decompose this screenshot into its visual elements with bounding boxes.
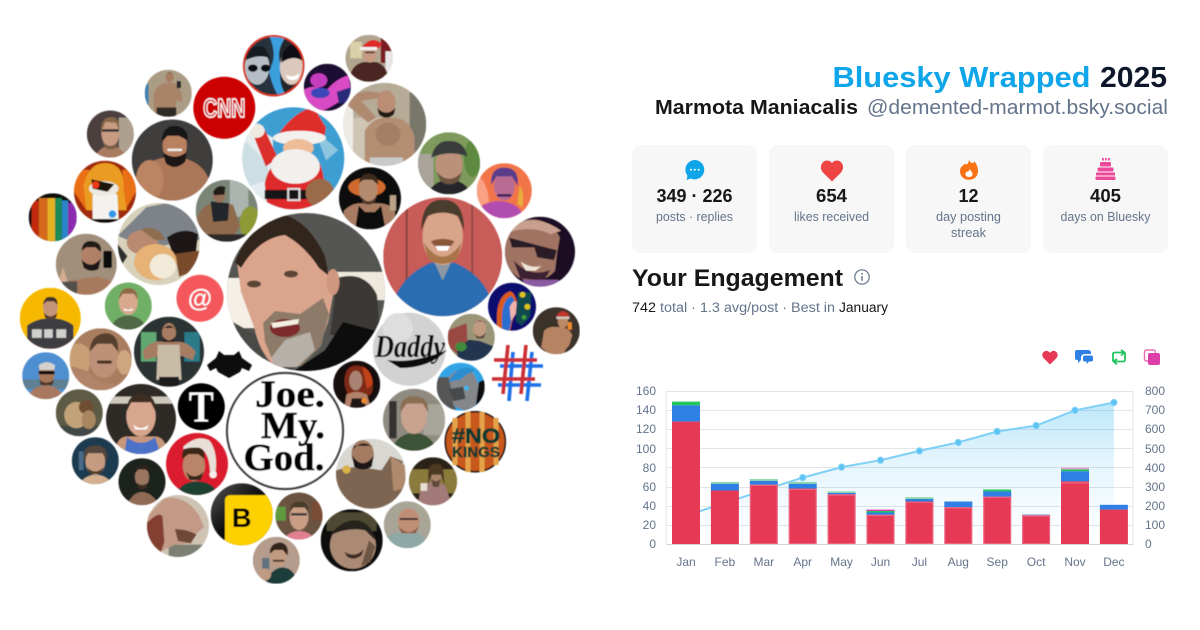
- avatar: stained glass: [488, 283, 536, 331]
- stat card: likes received: [769, 145, 894, 253]
- avatar: hairy chest man: [336, 439, 406, 509]
- month labels: Apr: [793, 555, 812, 569]
- stat card: days on Bluesky: days on Bluesky: [1060, 210, 1151, 224]
- avatar: yellow B logo: B: [232, 502, 252, 533]
- line points: [800, 399, 1117, 481]
- bar: Jun: [866, 510, 894, 544]
- avatar: bald man glasses: [384, 501, 431, 548]
- avatar: at sign logo: @: [188, 285, 212, 313]
- profile name and handle: Marmota Maniacalis: [655, 97, 858, 119]
- avatar: black tank top man: [339, 167, 401, 229]
- avatar: man on yellow: [20, 288, 81, 349]
- title: Bluesky Wrapped: [832, 62, 1090, 94]
- avatar: santa figurine: [240, 105, 346, 211]
- avatar: moustache purple portrait: [477, 163, 532, 218]
- avatar: twin men: [243, 35, 305, 96]
- icon: chat bubble: [685, 160, 704, 180]
- avatar: man lying with flowers: [448, 314, 495, 361]
- avatar: man with glasses: [87, 110, 134, 158]
- avatar: Joe My God logo: [227, 373, 343, 489]
- avatar: moustache man lying: [70, 328, 132, 390]
- icon: legend heart: [1042, 351, 1058, 364]
- icon: info: [855, 270, 869, 284]
- icon: black wolf logo: [207, 351, 252, 378]
- bar: Mar: [750, 479, 778, 544]
- avatar: New York Times logo: T: [189, 382, 214, 432]
- avatar: man on rocks: [196, 180, 261, 242]
- avatar: bearded shirtless man: [131, 118, 214, 202]
- stat card: day posting streak: day posting: [936, 210, 1001, 224]
- right axis labels: 100: [1145, 518, 1165, 532]
- avatar: CNN logo: [193, 77, 255, 139]
- avatar: grey furry wolf: [437, 363, 485, 411]
- avatar: gym mirror man: [134, 317, 204, 387]
- month labels: Aug: [948, 555, 969, 569]
- icon: heart: [821, 160, 843, 182]
- avatar: man in robe with drink: [409, 457, 457, 505]
- month labels: Dec: [1103, 555, 1125, 569]
- avatar: magenta sleeping: [304, 64, 351, 111]
- stat card: likes received: likes received: [794, 210, 869, 224]
- right axis labels: 300: [1145, 480, 1165, 494]
- heading: Your Engagement: Your Engagement: [632, 265, 843, 292]
- avatar: pale man: [383, 389, 445, 451]
- left axis labels: 0: [649, 537, 656, 551]
- cumulative area: [686, 402, 1114, 544]
- month labels: Feb: [715, 555, 736, 569]
- avatar: Joe My God logo: God.: [244, 437, 324, 479]
- avatar: dark portrait shirtless: [118, 458, 166, 505]
- month labels: Nov: [1064, 555, 1086, 569]
- avatar: man in santa hat on red: [166, 433, 228, 495]
- left axis labels: 120: [636, 422, 656, 436]
- avatar: man in jacket: [72, 437, 119, 484]
- bar: Aug: [944, 502, 972, 544]
- right axis labels: 0: [1145, 537, 1152, 551]
- left axis labels: 100: [636, 442, 656, 456]
- profile name and handle: [655, 97, 1168, 119]
- avatar: red haired woman: [333, 361, 380, 408]
- stat card: day posting streak: streak: [951, 226, 987, 240]
- avatar: bald man saluting: [343, 83, 426, 167]
- month labels: Mar: [753, 555, 774, 569]
- engagement summary: 742: [632, 300, 656, 315]
- bar: Jul: [905, 497, 933, 544]
- icon: hashtag red and blue: [492, 345, 543, 401]
- right axis labels: 600: [1145, 422, 1165, 436]
- right axis labels: 500: [1145, 442, 1165, 456]
- month labels: Oct: [1027, 555, 1046, 569]
- left axis labels: [636, 384, 656, 551]
- stat card: days on Bluesky: [1043, 145, 1168, 253]
- right axis labels: [1145, 384, 1165, 551]
- avatar: dark frame man: [321, 509, 383, 571]
- avatar: profile of man: [147, 495, 209, 557]
- avatar: New York Times logo: [178, 382, 225, 432]
- left axis labels: 160: [636, 384, 656, 398]
- avatar: Daddy logo: [373, 313, 447, 386]
- bar: Feb: [711, 482, 739, 544]
- stat card: day posting streak: 12: [958, 186, 978, 206]
- stat card: posts and replies: [632, 145, 757, 253]
- bar: Nov: [1061, 468, 1089, 544]
- engagement summary: [632, 300, 888, 315]
- stat card: days on Bluesky: 405: [1090, 186, 1121, 206]
- icon: legend quote: [1144, 350, 1160, 365]
- avatar: blue shirt man red wall: [383, 197, 502, 316]
- icon: legend replies: [1075, 350, 1093, 364]
- avatar: man with glasses in garden: [276, 492, 322, 540]
- engagement summary: total · 1.3 avg/post · Best in: [660, 300, 835, 315]
- bar: Oct: [1022, 514, 1050, 544]
- avatar: man holding mug: [253, 537, 300, 584]
- stacked bars: [672, 402, 1128, 544]
- month labels: Jan: [676, 555, 696, 569]
- avatar: yellow B logo: [210, 482, 274, 546]
- bar: Sep: [983, 490, 1011, 544]
- avatar: smiling man in blue tank: [106, 384, 176, 454]
- icon: flame: [960, 160, 978, 180]
- right axis labels: 700: [1145, 403, 1165, 417]
- bar: Jan: [672, 402, 700, 544]
- left axis labels: 60: [643, 480, 656, 494]
- avatar: No Kings sign: KINGS: [452, 444, 500, 461]
- avatar: rainbow torso: [29, 193, 77, 241]
- avatar: beach sunglasses man: [22, 352, 69, 399]
- left axis labels: 20: [643, 518, 656, 532]
- avatar: fire cartoon: [74, 161, 136, 223]
- avatar: glasses man purple: [504, 217, 575, 287]
- month labels: Jul: [912, 555, 927, 569]
- month labels: Jun: [871, 555, 890, 569]
- icon: birthday cake: [1096, 158, 1116, 180]
- avatar: shirtless mirror selfie: [145, 70, 192, 117]
- left axis labels: 40: [643, 499, 656, 513]
- month labels: [676, 555, 1125, 569]
- stat card: likes received: 654: [816, 186, 847, 206]
- left axis labels: 80: [643, 461, 656, 475]
- bar: Apr: [789, 482, 817, 544]
- right axis labels: 800: [1145, 384, 1165, 398]
- bar: May: [828, 491, 856, 544]
- avatar: man in cap: [418, 132, 481, 194]
- avatar: CNN logo: CNN: [203, 93, 245, 123]
- right axis labels: 400: [1145, 461, 1165, 475]
- icon: legend repost: [1113, 350, 1125, 364]
- stat card: posts and replies: posts · replies: [656, 210, 733, 224]
- chart legend icons: [1042, 350, 1160, 365]
- avatar: Joe My God logo: Joe.: [255, 374, 325, 416]
- right axis labels: 200: [1145, 499, 1165, 513]
- avatar: painted nude figure: [56, 389, 103, 436]
- avatar: man with orange cat: [118, 203, 200, 285]
- cumulative line: [686, 402, 1114, 516]
- month labels: May: [830, 555, 853, 569]
- month labels: Sep: [987, 555, 1008, 569]
- left axis labels: 140: [636, 403, 656, 417]
- stat card: day posting streak: [906, 145, 1031, 253]
- title: 2025: [1100, 62, 1167, 94]
- avatar: man on green: [105, 282, 152, 330]
- bar: Dec: [1100, 505, 1128, 544]
- avatar: at sign logo: [176, 275, 224, 322]
- avatar bubble cluster: [20, 35, 580, 584]
- engagement chart: [636, 384, 1165, 569]
- profile name and handle: @demented-marmot.bsky.social: [867, 97, 1168, 119]
- stat card: posts and replies: 349 · 226: [656, 186, 732, 206]
- avatar: man with santa hat mirror: [533, 307, 580, 354]
- avatar: bearded selfie with phone: [56, 234, 117, 295]
- avatar: No Kings sign: #NO: [452, 425, 500, 448]
- avatar: Joe My God logo: My.: [261, 405, 325, 447]
- avatar: main face: [225, 210, 390, 380]
- engagement summary: January: [839, 300, 888, 315]
- chart grid: [666, 391, 1133, 544]
- avatar: No Kings sign: [445, 412, 505, 472]
- avatar: santa hat man: [346, 35, 392, 82]
- avatar: Daddy logo: Daddy: [374, 328, 446, 364]
